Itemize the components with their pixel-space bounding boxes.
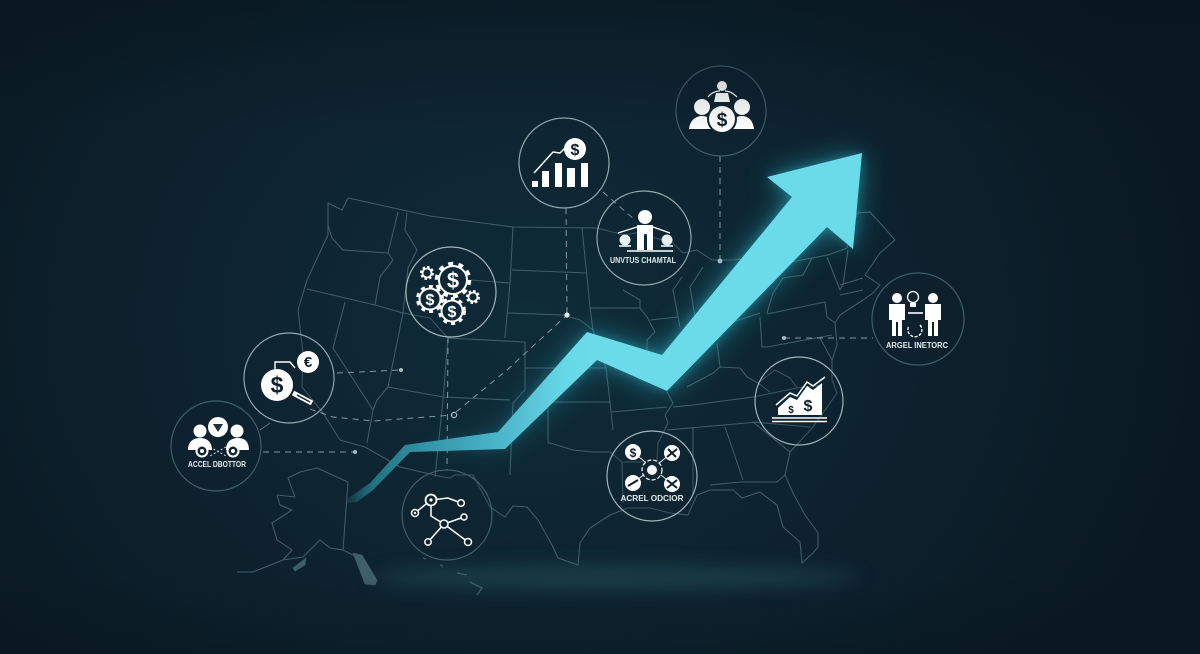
icon circle: accelerator (171, 401, 261, 491)
arrow glow (430, 153, 862, 451)
icon circle: angel investor (872, 273, 964, 365)
floor light band (370, 565, 860, 591)
icon circle: accelerator objectives: $ (630, 446, 637, 460)
icon circle: rising mountain chart: $ (804, 398, 813, 415)
icon circle: dollar gears: $ (448, 304, 457, 321)
icon circle: rising mountain chart: $ (788, 405, 794, 416)
connector nodes (353, 259, 786, 454)
icon circle: dollar gears: $ (426, 292, 435, 309)
growth arrow (345, 153, 862, 503)
icon circle: accelerator: ACCEL DBOTTOR (188, 460, 246, 469)
icon circle: angel investor: ARGEL INETORC (886, 341, 948, 350)
map: Hawaii islands (423, 558, 482, 595)
icon circle: investor group: $ (717, 110, 728, 131)
icon circle: investor group (676, 66, 766, 156)
short link between accelerator and currency circles (260, 423, 270, 430)
icon circle: dollar gears: $ (447, 268, 459, 293)
dashed connector lines (263, 156, 873, 470)
map: Alaska (237, 468, 375, 582)
icon circle: accelerator objectives (607, 431, 697, 521)
icon circle: network (402, 470, 492, 560)
icon circle: currency exchange: $ (271, 372, 284, 398)
icon circle: bar chart with dollar (519, 118, 609, 208)
icon circle: bar chart with dollar: $ (571, 142, 580, 159)
icon circle: currency exchange (244, 333, 334, 423)
icon circle: currency exchange: € (304, 354, 313, 371)
icon circle: rising mountain chart (755, 357, 843, 445)
map: Alaska panhandle islands (293, 553, 377, 585)
map of the United States (237, 198, 895, 595)
icon circle: accelerator objectives: ACREL ODCIOR (620, 494, 684, 503)
icon circle: unit capital: UNVTUS CHAMTAL (610, 256, 676, 265)
icon circle: dollar gears (406, 247, 496, 337)
icon circle: unit capital (597, 191, 691, 285)
